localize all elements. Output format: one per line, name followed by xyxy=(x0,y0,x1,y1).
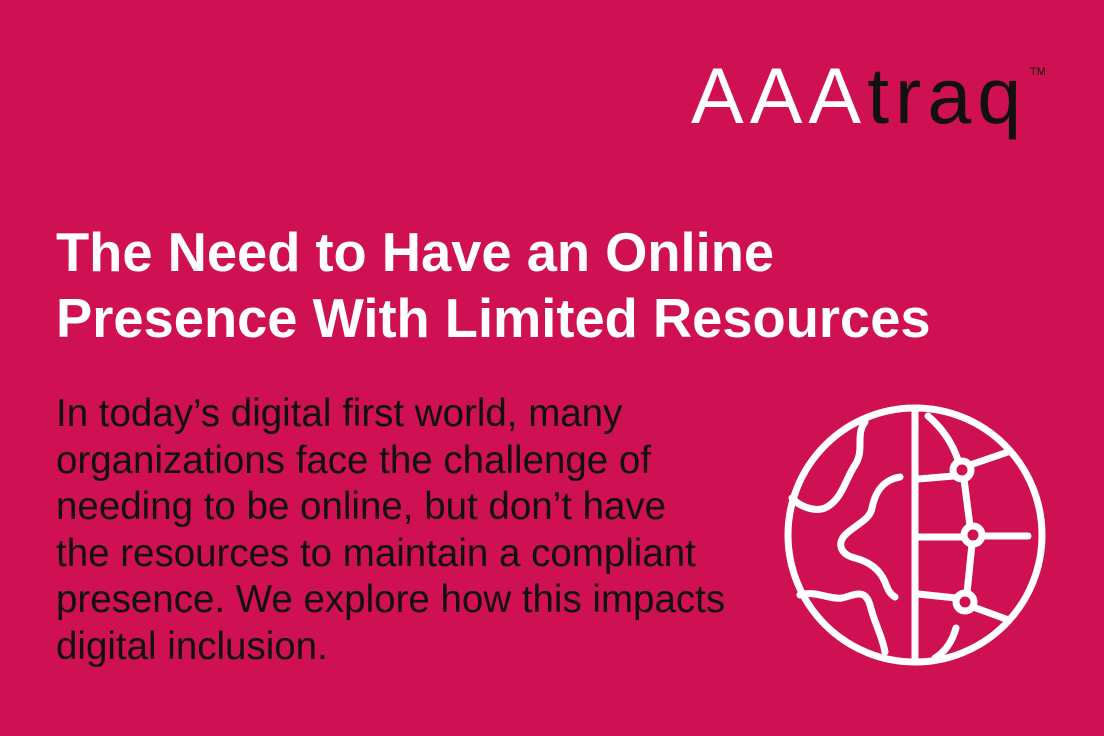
title xyxy=(56,222,931,349)
body text: presence. We explore how this impacts xyxy=(56,578,725,621)
icon: globe xyxy=(784,404,1046,666)
body text: digital inclusion. xyxy=(56,624,328,668)
body text: needing to be online, but don’t have xyxy=(56,485,666,528)
body text: the resources to maintain a compliant xyxy=(56,532,696,574)
logo: AAAtraq xyxy=(691,51,1027,140)
trademark: TM xyxy=(1030,66,1046,78)
title: Presence With Limited Resources xyxy=(56,288,931,349)
body text: organizations face the challenge of xyxy=(56,438,651,482)
title: The Need to Have an Online xyxy=(56,222,774,283)
body text xyxy=(56,392,725,668)
body text: In today’s digital first world, many xyxy=(56,392,622,435)
